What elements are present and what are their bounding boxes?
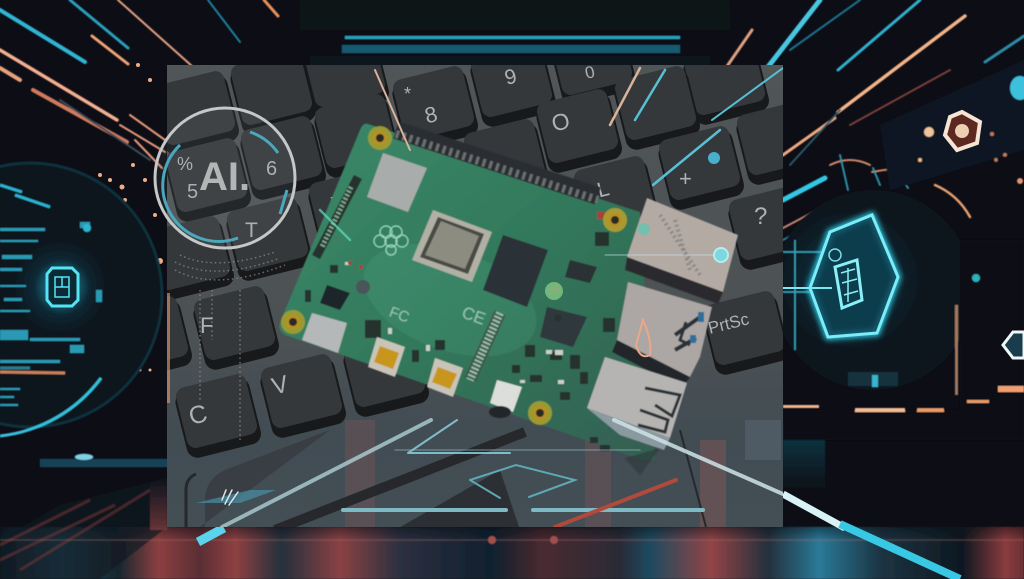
key legends: ? [754,203,767,230]
translucent central photo panel [167,65,783,527]
key legends [177,62,767,431]
key legends: T [245,219,258,242]
ribbon connectors [316,177,358,257]
light streaks top left [0,0,278,168]
key legends: 5 [187,181,198,203]
secondary chips [540,307,587,347]
single board computer [280,124,738,475]
key legends: O [549,107,572,137]
left circular hub with icon [0,163,162,436]
key legends: 0 [583,62,597,83]
metal can [367,153,427,212]
board markings: FC [387,304,412,327]
USB-C port [302,313,347,353]
board markings: CE [459,303,488,329]
AI badge [155,108,295,248]
black chip [483,235,548,307]
key legends: C [186,399,210,431]
dot burst left [72,63,163,372]
small parts [305,232,615,451]
key legends: % [177,154,193,174]
overlay light lines on panel [222,68,783,527]
key legends: + [679,166,692,191]
processor [412,210,492,282]
network nodes on ports [545,152,728,356]
keyboard keys [154,65,783,514]
floor light beams [198,494,960,579]
AI badge: AI. [199,155,250,199]
lower deck stripes [186,420,781,530]
key legends: 9 [502,65,519,90]
raspberry outline [374,226,408,255]
key legends: L [595,177,612,202]
small hexagon icon [945,112,980,150]
right scene panels [772,60,1024,440]
left glowing icon [34,259,90,315]
key legends: 8 [422,101,440,128]
key legends: * [404,84,411,104]
key legends: 6 [266,158,277,180]
key legends: Y [330,194,342,214]
board markings [389,306,486,326]
HDMI ports [368,337,405,377]
light streaks top right [712,0,1024,240]
USB port upper [617,282,712,377]
dotted overlay [175,252,285,440]
soft light over board [364,244,536,356]
ethernet port [627,198,738,292]
USB port lower [587,357,687,438]
header pins [396,130,598,196]
key legends: PrtSc [706,309,751,338]
large cyan hexagon icon [783,215,898,337]
hexagon icon at right edge [1003,332,1024,358]
audio jack [490,380,522,412]
key legends: V [269,370,291,401]
mounting holes [368,126,392,150]
key legends: F [200,313,213,338]
board body [280,124,655,460]
